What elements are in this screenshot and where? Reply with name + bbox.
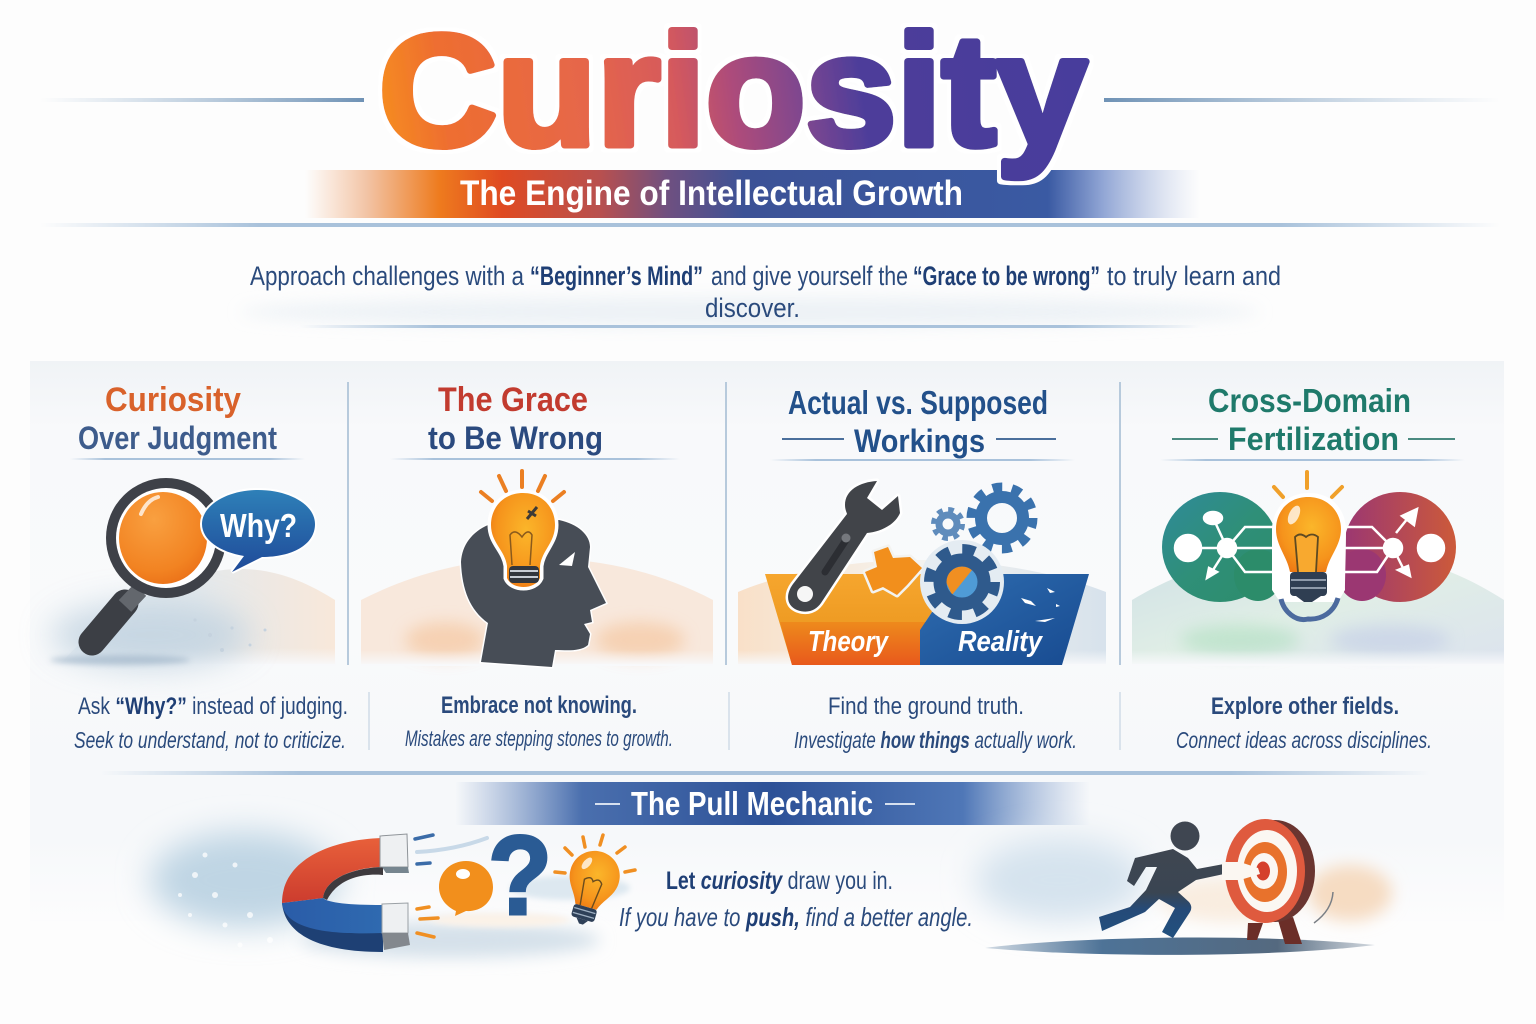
subtitle text: The Engine of Intellectual Growth [460,174,963,213]
box: reality side: Reality [958,626,1044,658]
motion swoosh [1314,892,1333,923]
hill background [738,560,1106,664]
icon: dark gear [920,540,1004,624]
icon: head silhouette [461,520,606,667]
intro text: “Beginner’s Mind” [530,261,703,291]
main panel background [30,361,1504,921]
heading: Cross-Domain [1208,382,1411,419]
icon: question mark: ? [488,813,552,938]
hill background [60,569,335,664]
hill background [1132,548,1504,664]
subtitle ribbon [305,170,1200,218]
bottom left wash [150,832,630,958]
box: theory front [780,622,930,665]
green circle [1162,492,1282,602]
icon: wrench slot [825,540,846,572]
icon: wrench rivet [842,534,850,542]
body text: Embrace not knowing. [441,692,637,719]
heading [390,381,680,460]
header rule left [40,98,364,102]
icon: why speech bubble: Why? [220,507,297,544]
icon: light bulb [1276,497,1341,602]
intro text: discover. [705,293,800,323]
icon: wrench eye [797,586,813,602]
intro text: to truly learn and [1107,261,1281,291]
blue wash [50,601,266,669]
peach wash [405,622,685,658]
bottom right wash [975,838,1392,922]
small bulb rays [555,835,635,873]
intro text [250,261,1281,323]
heading: Curiosity [105,381,241,419]
pull mechanic banner: The Pull Mechanic [631,785,873,822]
rule under ribbon [40,223,1500,227]
icon: light bulb in head [491,493,555,587]
intro text: “Grace to be wrong” [913,261,1100,291]
icon: orange gear fragment [865,547,922,595]
icon: blue gear small [934,510,962,538]
header rule right [1104,98,1500,102]
pull section rule [100,771,1430,775]
body text [1176,693,1432,753]
icon: why speech bubble [202,490,315,572]
intro wash [240,297,1260,327]
speckle wash [1180,625,1450,655]
heading: The Grace [438,381,588,419]
box: theory side back [765,574,932,665]
heading: Workings [854,423,985,459]
hill background [361,558,713,664]
icon: connecting wave [1281,598,1338,620]
box: reality side [920,574,1089,665]
panel: actual vs supposed workings [738,384,1106,753]
icon: orange speech bubble [439,861,493,916]
intro text: and give yourself the [711,261,908,291]
red circle [1338,492,1456,602]
bulb halo [1272,493,1346,602]
body text: Investigate how things actually work. [794,727,1077,753]
body text: Connect ideas across disciplines. [1176,727,1432,753]
box: theory front: Theory [808,626,890,658]
body text [794,693,1077,753]
heading: Fertilization [1228,421,1399,457]
icon: eye notch [559,552,575,566]
heading: Over Judgment [78,420,277,456]
heading: to Be Wrong [428,420,603,456]
column dividers [348,382,1120,750]
body text [74,693,348,753]
intro text: Approach challenges with a [250,261,525,291]
panel: the grace to be wrong [361,381,713,751]
pull mechanic banner [455,782,1090,825]
body text: Find the ground truth. [828,693,1024,720]
body text: Explore other fields. [1211,693,1399,720]
icon: wrench [788,481,900,612]
panel: curiosity over judgment [36,381,348,753]
body text: Mistakes are stepping stones to growth. [405,726,673,751]
heading: Actual vs. Supposed [788,384,1048,421]
pull text: If you have to push, find a better angle. [619,902,973,932]
title: Curiosity [379,3,1087,179]
icon: target [1222,819,1315,944]
heading [70,381,305,460]
body text: Seek to understand, not to criticize. [74,727,346,753]
icon: magnifying glass [92,478,226,642]
icon: running figure [1099,822,1226,938]
heading [1160,382,1465,461]
pull text [619,867,973,932]
pull text: Let curiosity draw you in. [666,867,893,895]
ground shadow [985,938,1375,955]
body text [405,692,673,751]
icon: bulb rays [1274,472,1342,497]
panel: cross-domain fertilization [1132,382,1504,753]
magnet field marks [415,835,487,937]
icon: magnet [282,834,410,952]
icon: small light bulb [557,845,626,931]
heading [770,384,1075,461]
body text: Ask “Why?” instead of judging. [78,693,348,720]
icon: blue gear large [971,487,1033,549]
icon: bulb rays [481,471,564,501]
